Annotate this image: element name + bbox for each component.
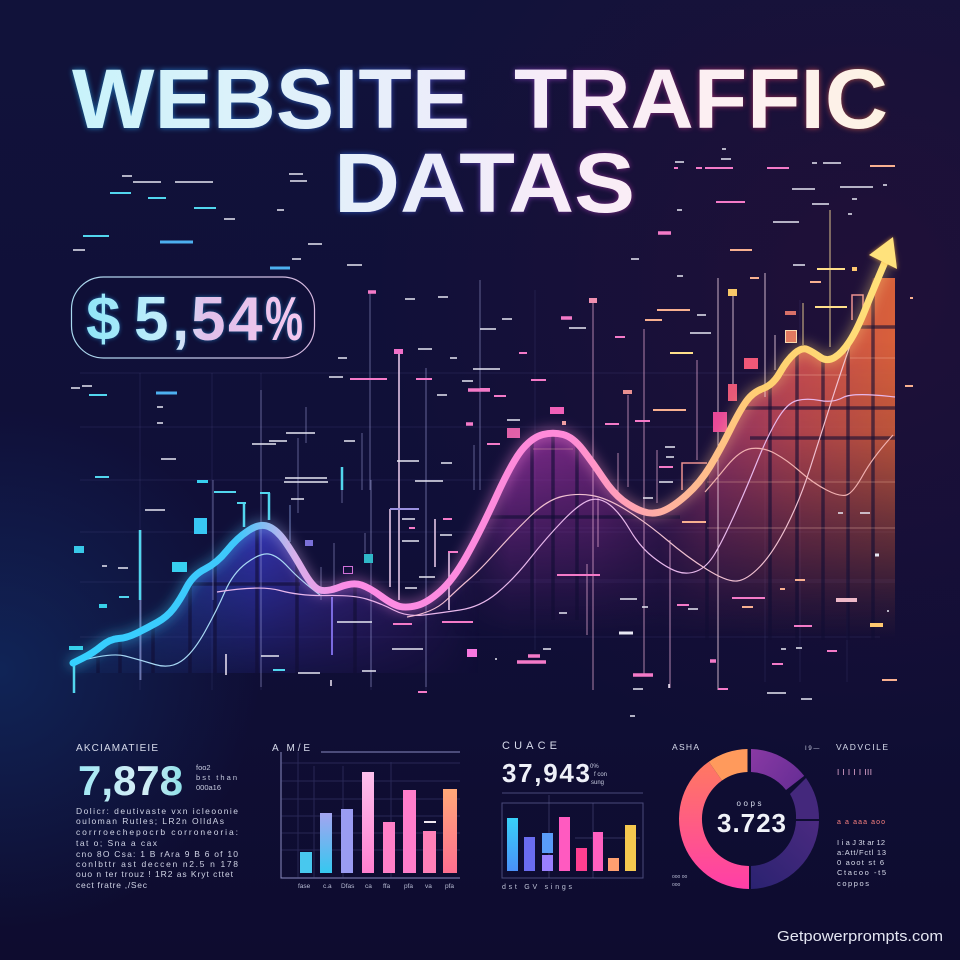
side note: f con xyxy=(594,772,607,778)
callout: headline figure pill: $5,54 xyxy=(86,285,263,354)
traffic curve with thin secondary lines xyxy=(73,262,895,666)
body text: cect fratre ,/Sec xyxy=(76,880,148,890)
panel: bar chart two xyxy=(502,740,643,891)
body text: corrroechepocrb corroneoria: xyxy=(76,827,238,837)
axis labels: pfa xyxy=(445,883,454,890)
body text: ouloman Rutles; LR2n OlldAs xyxy=(76,816,224,826)
title: WEBSITE xyxy=(72,52,470,146)
panel: donut chart xyxy=(672,742,888,889)
white ticks xyxy=(71,149,889,716)
axis labels: c.a xyxy=(323,883,332,890)
callout: headline figure pill: $5,54 xyxy=(86,285,263,354)
outlined boxes xyxy=(344,295,863,574)
donut legend: coppos xyxy=(837,879,869,888)
pale grid lines inside area xyxy=(533,358,895,528)
chart frame xyxy=(502,793,643,878)
side note xyxy=(196,763,237,792)
panel: bar chart one xyxy=(272,743,460,890)
bars xyxy=(300,852,312,873)
body text xyxy=(76,806,238,890)
dark grid bars xyxy=(98,270,895,673)
area fill: magenta to orange segment xyxy=(468,278,895,626)
body text: Dolicr: deutivaste vxn icleoonie xyxy=(76,806,238,816)
donut center value: oops xyxy=(736,799,762,808)
side note: 0% xyxy=(590,764,599,770)
bars xyxy=(507,818,518,871)
secondary line: long lilac wave xyxy=(217,395,895,615)
side note: foo2 xyxy=(196,763,211,772)
panel: summary statistic xyxy=(76,743,238,890)
body text: conlbttr ast deccen n2.5 n 178 xyxy=(76,859,238,869)
axes and grid xyxy=(281,752,460,878)
title: TRAFFIC xyxy=(514,52,888,146)
secondary line: right wave xyxy=(705,435,893,495)
side note: 000a16 xyxy=(196,783,221,792)
callout: headline figure pill: % xyxy=(265,285,303,354)
title: DATAS xyxy=(334,136,635,230)
body text: cno 8O Csa: 1 B rAra 9 B 6 of 10 xyxy=(76,849,238,859)
main traffic curve xyxy=(73,262,885,663)
title xyxy=(72,52,888,230)
secondary line: rising to arrow xyxy=(407,263,887,617)
pink ticks xyxy=(350,168,837,692)
axis labels: pfa xyxy=(404,883,413,890)
side note: sung xyxy=(591,780,604,786)
title: DATAS xyxy=(334,136,635,230)
side note: bst than xyxy=(196,773,237,782)
body text: tat o; Sna a cax xyxy=(76,838,158,848)
watermark: Getpowerprompts.com xyxy=(777,928,943,945)
donut legend: ooo xyxy=(672,882,681,888)
body text: ouo n ter trouz ! 1R2 as Kryt cttet xyxy=(76,869,234,879)
callout: headline figure pill xyxy=(72,277,314,358)
cyan and blue ticks xyxy=(74,193,342,693)
donut legend: I i a J 3t ar 12 xyxy=(837,838,885,847)
area fill: blue segment xyxy=(80,528,458,673)
panel: donut chart: 3.723 xyxy=(717,808,786,838)
donut legend: a:Att/Fctl 13 xyxy=(837,848,886,857)
side note xyxy=(590,764,607,786)
axis labels: fase xyxy=(298,883,311,890)
axis labels: Dfas xyxy=(341,883,355,890)
axis labels: ffa xyxy=(383,883,390,890)
axis labels xyxy=(298,883,454,890)
arrowhead xyxy=(869,237,897,269)
area under the traffic curve xyxy=(73,270,895,700)
peach and yellow ticks xyxy=(645,166,913,680)
big number: 37,943 xyxy=(502,758,590,788)
axis caption: dst GV sings xyxy=(502,884,572,891)
donut legend xyxy=(672,742,888,888)
donut legend: 0 aoot st 6 xyxy=(837,858,884,867)
scattered data ticks and stems xyxy=(69,149,913,716)
donut legend: a a aaa aoo xyxy=(837,819,885,826)
donut legend: ooo oo xyxy=(672,874,688,880)
callout: headline figure pill: % xyxy=(265,285,303,354)
big number: 7,878 xyxy=(78,757,183,804)
donut legend: I 9 — xyxy=(805,746,819,752)
title: WEBSITE xyxy=(72,52,470,146)
heading: AKCIAMATIEIE xyxy=(76,743,158,754)
curve glow xyxy=(73,262,885,663)
heading: A M/E xyxy=(272,743,310,754)
heading: ASHA xyxy=(672,742,699,752)
donut legend: VADVCILE xyxy=(836,742,888,752)
filled squares and outlined markers xyxy=(69,289,797,657)
donut segments xyxy=(679,749,819,889)
title: TRAFFIC xyxy=(514,52,888,146)
donut legend: I I I I I III xyxy=(837,768,872,777)
donut legend: Ctacoo -t5 xyxy=(837,868,886,877)
heading: CUACE xyxy=(502,740,557,752)
secondary line: blue dip xyxy=(73,554,320,666)
thin stems xyxy=(140,210,830,690)
axis labels: ca xyxy=(365,883,372,890)
faint chart grid xyxy=(80,273,895,690)
axis labels: va xyxy=(425,883,432,890)
